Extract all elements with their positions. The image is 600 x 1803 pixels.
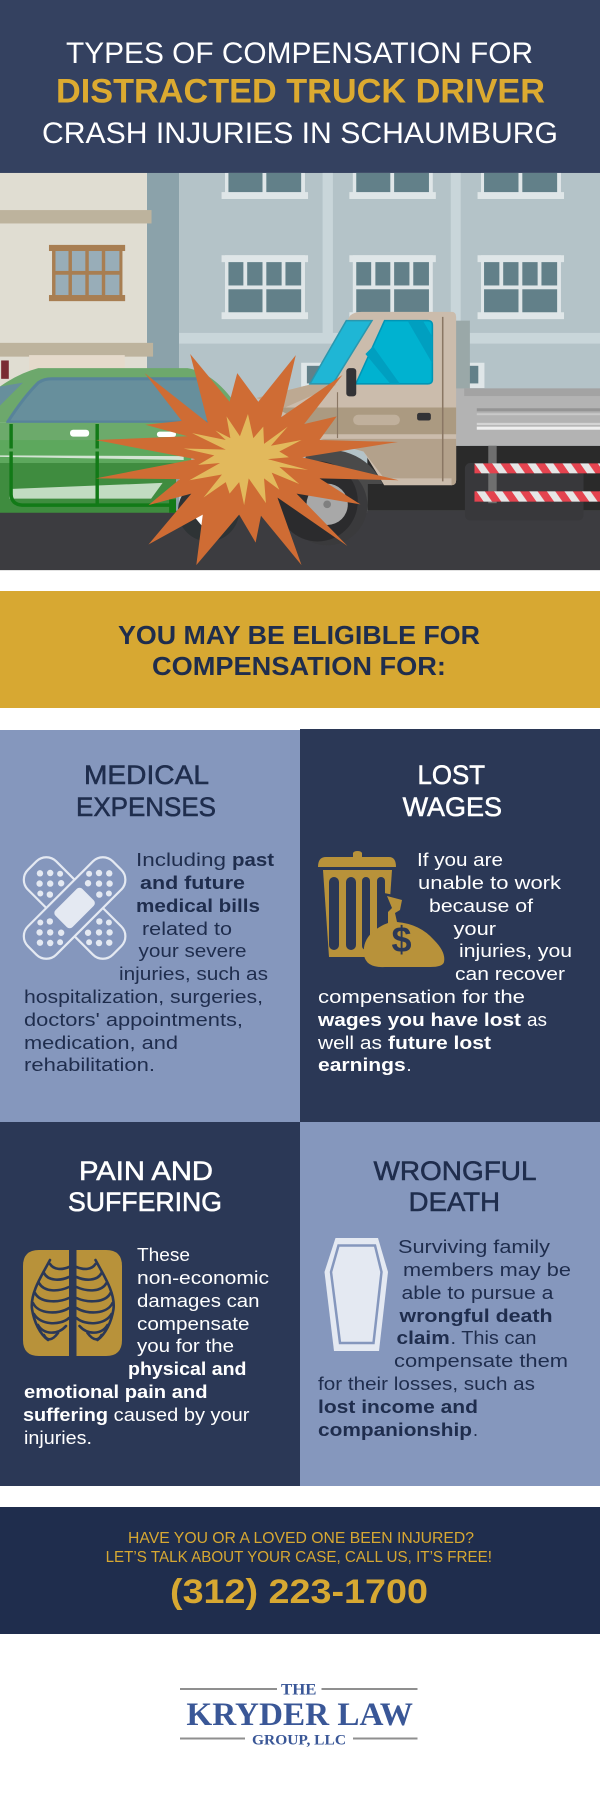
title line 2: DISTRACTED TRUCK DRIVER	[56, 72, 545, 110]
body text: caused by your	[114, 1405, 250, 1425]
heading: SUFFERING	[68, 1187, 222, 1217]
logo: The Kryder Law Group, LLC: GROUP, LLC	[252, 1733, 346, 1749]
heading: LOST	[418, 760, 485, 790]
body text	[23, 1245, 269, 1448]
car wheel	[178, 480, 239, 541]
panel: wrongful death	[300, 1122, 600, 1486]
body text: earnings	[318, 1055, 406, 1075]
road	[0, 511, 600, 570]
heading	[76, 760, 216, 822]
body text: These	[137, 1245, 190, 1265]
call to action banner	[0, 1507, 600, 1634]
body text: medical bills	[136, 896, 260, 916]
explosion burst	[96, 354, 399, 565]
icon: rib cage	[23, 1250, 122, 1356]
body text: members may be	[403, 1260, 571, 1280]
body text: as	[527, 1010, 547, 1030]
body text: able to pursue a	[402, 1283, 555, 1303]
body text: non-economic	[137, 1268, 269, 1288]
side mirror	[346, 368, 356, 396]
side window	[356, 321, 432, 384]
heading: MEDICAL	[84, 760, 209, 790]
body text: past	[232, 850, 274, 870]
body text: because of	[429, 896, 534, 916]
body text: your severe	[138, 941, 246, 961]
body text: medication, and	[24, 1033, 178, 1053]
panel: lost wages	[300, 729, 600, 1122]
call to action text: HAVE YOU OR A LOVED ONE BEEN INJURED?	[128, 1530, 474, 1547]
body text: doctors' appointments,	[24, 1010, 243, 1030]
body text: compensation for the	[318, 987, 525, 1007]
body text: suffering	[23, 1405, 108, 1425]
heading: DEATH	[409, 1187, 500, 1217]
body text: hospitalization, surgeries,	[24, 987, 263, 1007]
body text	[317, 850, 572, 1075]
truck front wheel	[277, 450, 383, 545]
eligibility banner: COMPENSATION FOR:	[152, 651, 446, 681]
body text: .	[406, 1055, 412, 1075]
body text: Including	[136, 850, 226, 870]
body text: damages can	[137, 1291, 260, 1311]
body text: related to	[142, 919, 232, 939]
body text: injuries, such as	[119, 964, 268, 984]
body text: If you are	[417, 850, 503, 870]
upper windows row	[222, 173, 564, 199]
call to action text: LET’S TALK ABOUT YOUR CASE, CALL US, IT’S FREE!	[106, 1549, 492, 1566]
body text: claim	[396, 1328, 450, 1348]
body text: you for the	[137, 1336, 234, 1356]
building backdrop	[147, 173, 600, 517]
body text: wages you have lost	[317, 1010, 521, 1030]
body text: rehabilitation.	[24, 1055, 155, 1075]
heading	[403, 760, 502, 822]
windshield	[310, 321, 372, 384]
middle windows row	[222, 255, 564, 319]
heading	[68, 1156, 222, 1217]
body text: your	[454, 919, 496, 939]
body text: well as	[317, 1033, 382, 1053]
panel: medical expenses	[0, 730, 300, 1122]
banner text: YOU MAY BE ELIGIBLE FOR	[118, 620, 480, 650]
call to action text	[106, 1530, 492, 1566]
body text: can recover	[455, 964, 565, 984]
body text: wrongful death	[398, 1306, 553, 1326]
heading	[374, 1156, 536, 1217]
body text: injuries, you	[459, 941, 572, 961]
icon: trash can and money bag	[318, 851, 444, 967]
eligibility banner	[0, 591, 600, 708]
body text: and future	[140, 873, 245, 893]
body text: compensate	[137, 1314, 250, 1334]
title line 3: CRASH INJURIES IN SCHAUMBURG	[42, 117, 558, 150]
body text	[318, 1237, 571, 1440]
green car	[0, 368, 239, 541]
body text: physical and	[128, 1359, 246, 1379]
logo: The Kryder Law Group, LLC	[180, 1682, 418, 1749]
icon: coffin	[324, 1238, 388, 1351]
body text: .	[473, 1420, 478, 1440]
body text: companionship	[318, 1420, 472, 1440]
body text: lost income and	[318, 1397, 478, 1417]
body text: injuries.	[24, 1428, 92, 1448]
body text: future lost	[388, 1033, 491, 1053]
title banner	[0, 0, 600, 173]
icon: crossed bandages	[18, 851, 131, 965]
phone number: (312) 223-1700	[170, 1573, 428, 1611]
logo: The Kryder Law Group, LLC: KRYDER LAW	[186, 1697, 413, 1733]
truck cab	[256, 312, 456, 485]
heading: WRONGFUL	[374, 1156, 536, 1186]
heading: EXPENSES	[76, 792, 216, 822]
body text: unable to work	[418, 873, 562, 893]
body text: compensate them	[394, 1351, 568, 1371]
illustration: truck and car crash scene	[0, 173, 600, 570]
truck flatbed and chassis	[367, 321, 600, 520]
dollar sign: $	[391, 919, 412, 960]
title line 1: TYPES OF COMPENSATION FOR	[66, 37, 533, 70]
body text: . This can	[450, 1328, 536, 1348]
body text	[24, 850, 274, 1075]
body text: Surviving family	[398, 1237, 550, 1257]
heading: WAGES	[403, 792, 502, 822]
lower windows row	[301, 363, 484, 388]
body text: emotional pain and	[24, 1382, 208, 1402]
burst centre	[184, 414, 308, 505]
heading: PAIN AND	[79, 1156, 213, 1186]
left building	[0, 173, 153, 387]
panel: pain and suffering	[0, 1122, 300, 1486]
body text: for their losses, such as	[318, 1374, 535, 1394]
logo: The Kryder Law Group, LLC: THE	[281, 1682, 316, 1698]
